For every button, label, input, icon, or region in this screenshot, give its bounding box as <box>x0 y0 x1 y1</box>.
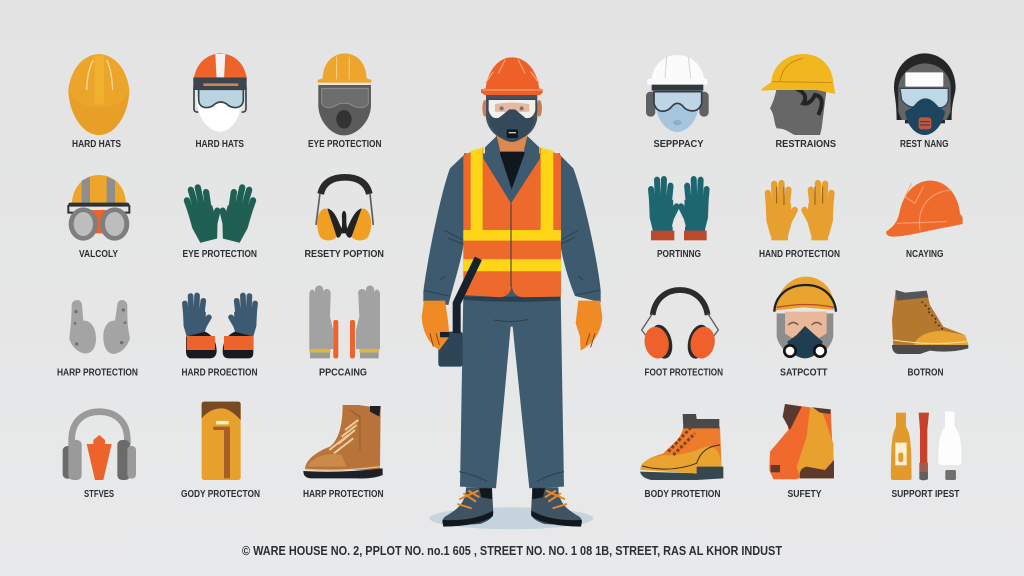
item: botron <box>892 290 968 378</box>
item: pprcaing <box>309 285 380 378</box>
item: portinng <box>649 179 708 260</box>
label: SEPPPACY <box>654 139 704 150</box>
sleeves <box>423 155 464 305</box>
icon: helmet with round goggles <box>68 175 129 241</box>
item: hard proection <box>182 295 258 378</box>
icon: yellow hard hat <box>68 54 129 135</box>
icon: orange ear muffs <box>642 290 718 361</box>
label: EYE PROTECTION <box>182 249 257 260</box>
boots <box>442 487 582 527</box>
item: harp protection 2 <box>303 405 384 500</box>
icon: yellow helmet with full respirator <box>774 277 836 358</box>
central worker figure <box>422 57 602 529</box>
label: PPCCAING <box>319 368 367 378</box>
icon: teal gloves with red cuffs <box>649 179 708 240</box>
item: eye protection gloves <box>182 184 257 260</box>
icon: hat with grey respirator <box>318 53 371 135</box>
torso <box>464 153 560 297</box>
item: valcoly <box>68 175 129 260</box>
label: SATPCOTT <box>780 368 828 378</box>
label: RESETY POPTION <box>304 249 384 260</box>
item: restraions <box>761 54 836 150</box>
icon: three bottles <box>891 412 962 480</box>
icon: dark helmet with goggles and mask <box>894 53 956 135</box>
icon: orange helmet with goggles <box>193 53 247 132</box>
item: foot protection <box>642 290 723 378</box>
label: SUPPORT IPEST <box>892 489 960 500</box>
label: VALCOLY <box>79 249 118 260</box>
bag <box>438 332 463 367</box>
label: PORTINNG <box>657 249 701 260</box>
item: stfves <box>63 412 136 500</box>
label: STFVES <box>84 489 114 500</box>
item: hard hats 2 <box>193 53 247 150</box>
item: harp protection 1 <box>57 300 138 378</box>
icon: white hat with goggles <box>646 55 709 132</box>
icon: grey headphones with orange arrow <box>63 412 136 480</box>
item: satpcott <box>774 277 836 378</box>
item: eye protection 1 <box>308 53 382 150</box>
icon: orange and yellow boot <box>640 414 723 480</box>
item: gody protecton <box>181 402 260 500</box>
item: hard hats 1 <box>68 54 129 150</box>
label: HAND PROTECTION <box>759 249 840 260</box>
label: HARP PROTECTION <box>303 489 384 500</box>
label: BOTRON <box>908 368 944 378</box>
icon: grey hand guards <box>69 300 130 354</box>
item: sufety <box>769 404 834 500</box>
gloves <box>422 301 449 350</box>
ground shadow <box>429 507 593 529</box>
icon: orange body panel <box>202 402 241 480</box>
label: BODY PROTETION <box>644 489 720 500</box>
vest <box>463 147 561 297</box>
strap <box>457 258 478 333</box>
label: HARD HATS <box>196 139 244 150</box>
footer address: © WARE HOUSE NO. 2, PPLOT NO. no.1 605 , STREET NO. NO. 1 08 1B, STREET, RAS AL KHOR INDUST <box>242 544 782 558</box>
icon: yellow gloves <box>766 183 833 240</box>
label: GODY PROTECTON <box>181 489 260 500</box>
neck and shirt <box>496 135 527 157</box>
head <box>481 57 543 142</box>
item: hand protection <box>759 183 840 260</box>
item: body protetion <box>640 414 723 500</box>
icon: brown work boot <box>303 405 383 478</box>
item: ncaying <box>886 181 963 260</box>
icon: grey gloves with orange bars <box>309 285 380 358</box>
label: FOOT PROTECTION <box>644 368 723 378</box>
trousers <box>460 293 564 488</box>
icon: tan work boot <box>892 290 968 354</box>
label: HARD HATS <box>72 139 121 150</box>
label: HARP PROTECTION <box>57 368 138 378</box>
label: EYE PROTECTION <box>308 139 382 150</box>
icon: orange protective vest <box>769 404 834 479</box>
icon: orange hard hat <box>886 181 963 237</box>
item: seppacy <box>646 55 709 150</box>
icon: yellow ear muffs <box>316 177 373 240</box>
item: support ipest <box>891 412 962 500</box>
collar <box>485 136 539 161</box>
icon: yellow hat on grey head profile <box>761 54 835 135</box>
icon: blue gloves with orange cuffs <box>183 295 257 358</box>
item: rest nang <box>894 53 956 150</box>
label: REST NANG <box>900 139 949 150</box>
label: HARD PROECTION <box>182 368 258 378</box>
label: RESTRAIONS <box>776 139 836 150</box>
label: SUFETY <box>788 489 822 500</box>
icon: green gloves <box>183 184 257 244</box>
item: resety poption <box>304 177 384 260</box>
label: NCAYING <box>906 249 944 260</box>
